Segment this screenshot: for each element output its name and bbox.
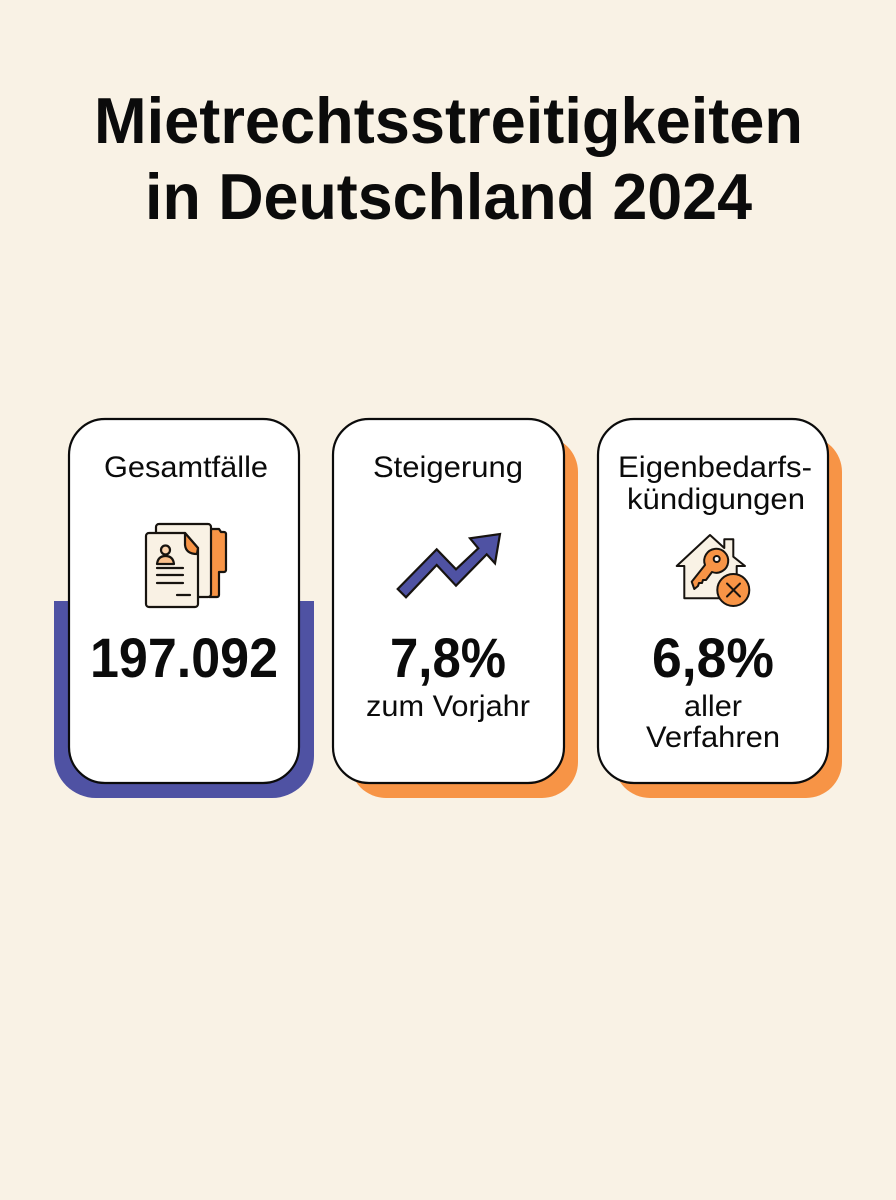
card body xyxy=(69,419,299,783)
label: Eigenbedarfskündigungen: kündigungen xyxy=(627,483,805,516)
value: 6,8%: 6,8% xyxy=(652,626,774,689)
card backing: orange xyxy=(614,436,842,798)
label: Gesamtfälle: Gesamtfälle xyxy=(104,451,268,484)
panel: Gesamtfälle xyxy=(54,419,314,798)
icon: documents and folder xyxy=(146,524,226,607)
note: aller Verfahren xyxy=(646,690,780,754)
title: in Deutschland 2024 xyxy=(145,160,752,233)
value: 197.092: 197.092 xyxy=(90,626,278,689)
value: 7,8%: 7,8% xyxy=(390,626,506,689)
icon: rising arrow xyxy=(398,534,500,597)
note: aller Verfahren: Verfahren xyxy=(646,721,780,754)
title xyxy=(94,84,803,233)
card body xyxy=(333,419,564,783)
label: Eigenbedarfskündigungen: Eigenbedarfs- xyxy=(618,451,812,484)
label: Steigerung: Steigerung xyxy=(373,451,523,484)
card backing: blue xyxy=(54,601,314,798)
card body xyxy=(598,419,828,783)
panel: Eigenbedarfskündigungen xyxy=(598,419,842,798)
icon: house with key and cross xyxy=(677,535,749,606)
title: Mietrechtsstreitigkeiten xyxy=(94,84,803,157)
panel: Steigerung xyxy=(333,419,578,798)
label: Eigenbedarfskündigungen xyxy=(618,451,812,516)
note: aller Verfahren: aller xyxy=(684,690,742,723)
card backing: orange xyxy=(350,436,578,798)
note: zum Vorjahr: zum Vorjahr xyxy=(366,690,530,723)
